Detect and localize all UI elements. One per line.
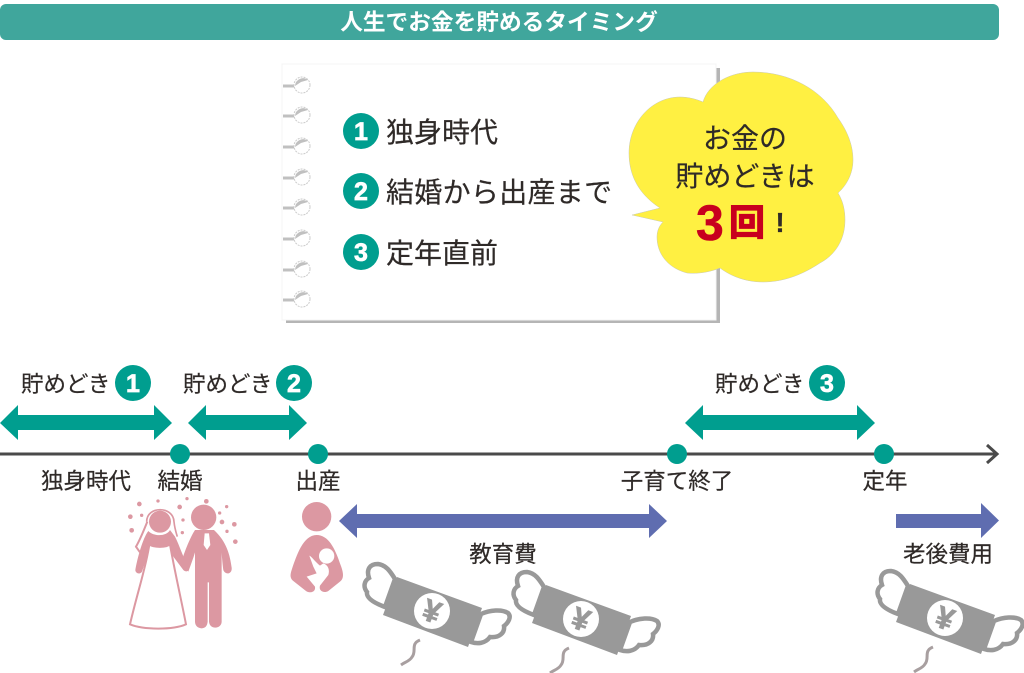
callout: speech bubble: ! (775, 207, 785, 238)
timeline labels: 定年 (862, 469, 908, 494)
callout: speech bubble: 回 (729, 202, 765, 243)
saving period 2: 貯めどき (183, 372, 272, 397)
list item 3: 定年直前 (386, 238, 498, 269)
list item 3 (343, 234, 498, 270)
saving period 3: 貯めどき (715, 372, 804, 397)
retirement cost label: 老後費用 (903, 542, 993, 567)
list item 2: 結婚から出産まで (386, 177, 612, 208)
list item 1: 1 (354, 118, 368, 146)
icon: flying money 1 (365, 564, 510, 665)
title bar (0, 4, 999, 40)
timeline labels (41, 469, 908, 494)
timeline axis with arrow (0, 444, 997, 464)
callout: speech bubble: 3 (696, 195, 724, 251)
saving period 3 (685, 365, 875, 440)
icon: flying money 2 (514, 572, 659, 673)
icon: flying money 1: ¥ (418, 592, 447, 631)
icon: flying money 3 (878, 571, 1023, 672)
saving period 2 (183, 365, 312, 440)
icon: mother and baby (291, 502, 343, 592)
confetti (128, 497, 238, 544)
retirement cost arrow (896, 503, 999, 538)
callout: speech bubble: お金の (703, 123, 787, 154)
timeline labels: 独身時代 (41, 469, 131, 494)
saving period 2: 2 (287, 370, 301, 398)
callout: speech bubble: 貯めどきは (675, 161, 815, 192)
saving period 1: 貯めどき (21, 372, 110, 397)
timeline labels: 子育て終了 (621, 469, 733, 494)
list item 3: 3 (354, 239, 368, 267)
education cost label: 教育費 (469, 542, 537, 567)
panel: notebook (282, 64, 720, 323)
education cost arrow (339, 504, 667, 538)
icon: flying money 3: ¥ (931, 599, 960, 638)
timeline labels: 結婚 (157, 469, 203, 494)
list item 1: 独身時代 (386, 117, 498, 148)
title bar: 人生でお金を貯めるタイミング (340, 9, 658, 35)
spiral rings (283, 77, 310, 307)
list item 2: 2 (354, 178, 368, 206)
timeline labels: 出産 (295, 469, 341, 494)
icon: wedding couple (128, 497, 238, 629)
callout: speech bubble (629, 72, 853, 282)
icon: flying money 2: ¥ (567, 600, 596, 639)
saving period 1 (0, 365, 172, 440)
list item 1 (343, 113, 498, 149)
saving period 3: 3 (820, 370, 834, 398)
saving period 1: 1 (126, 370, 140, 398)
